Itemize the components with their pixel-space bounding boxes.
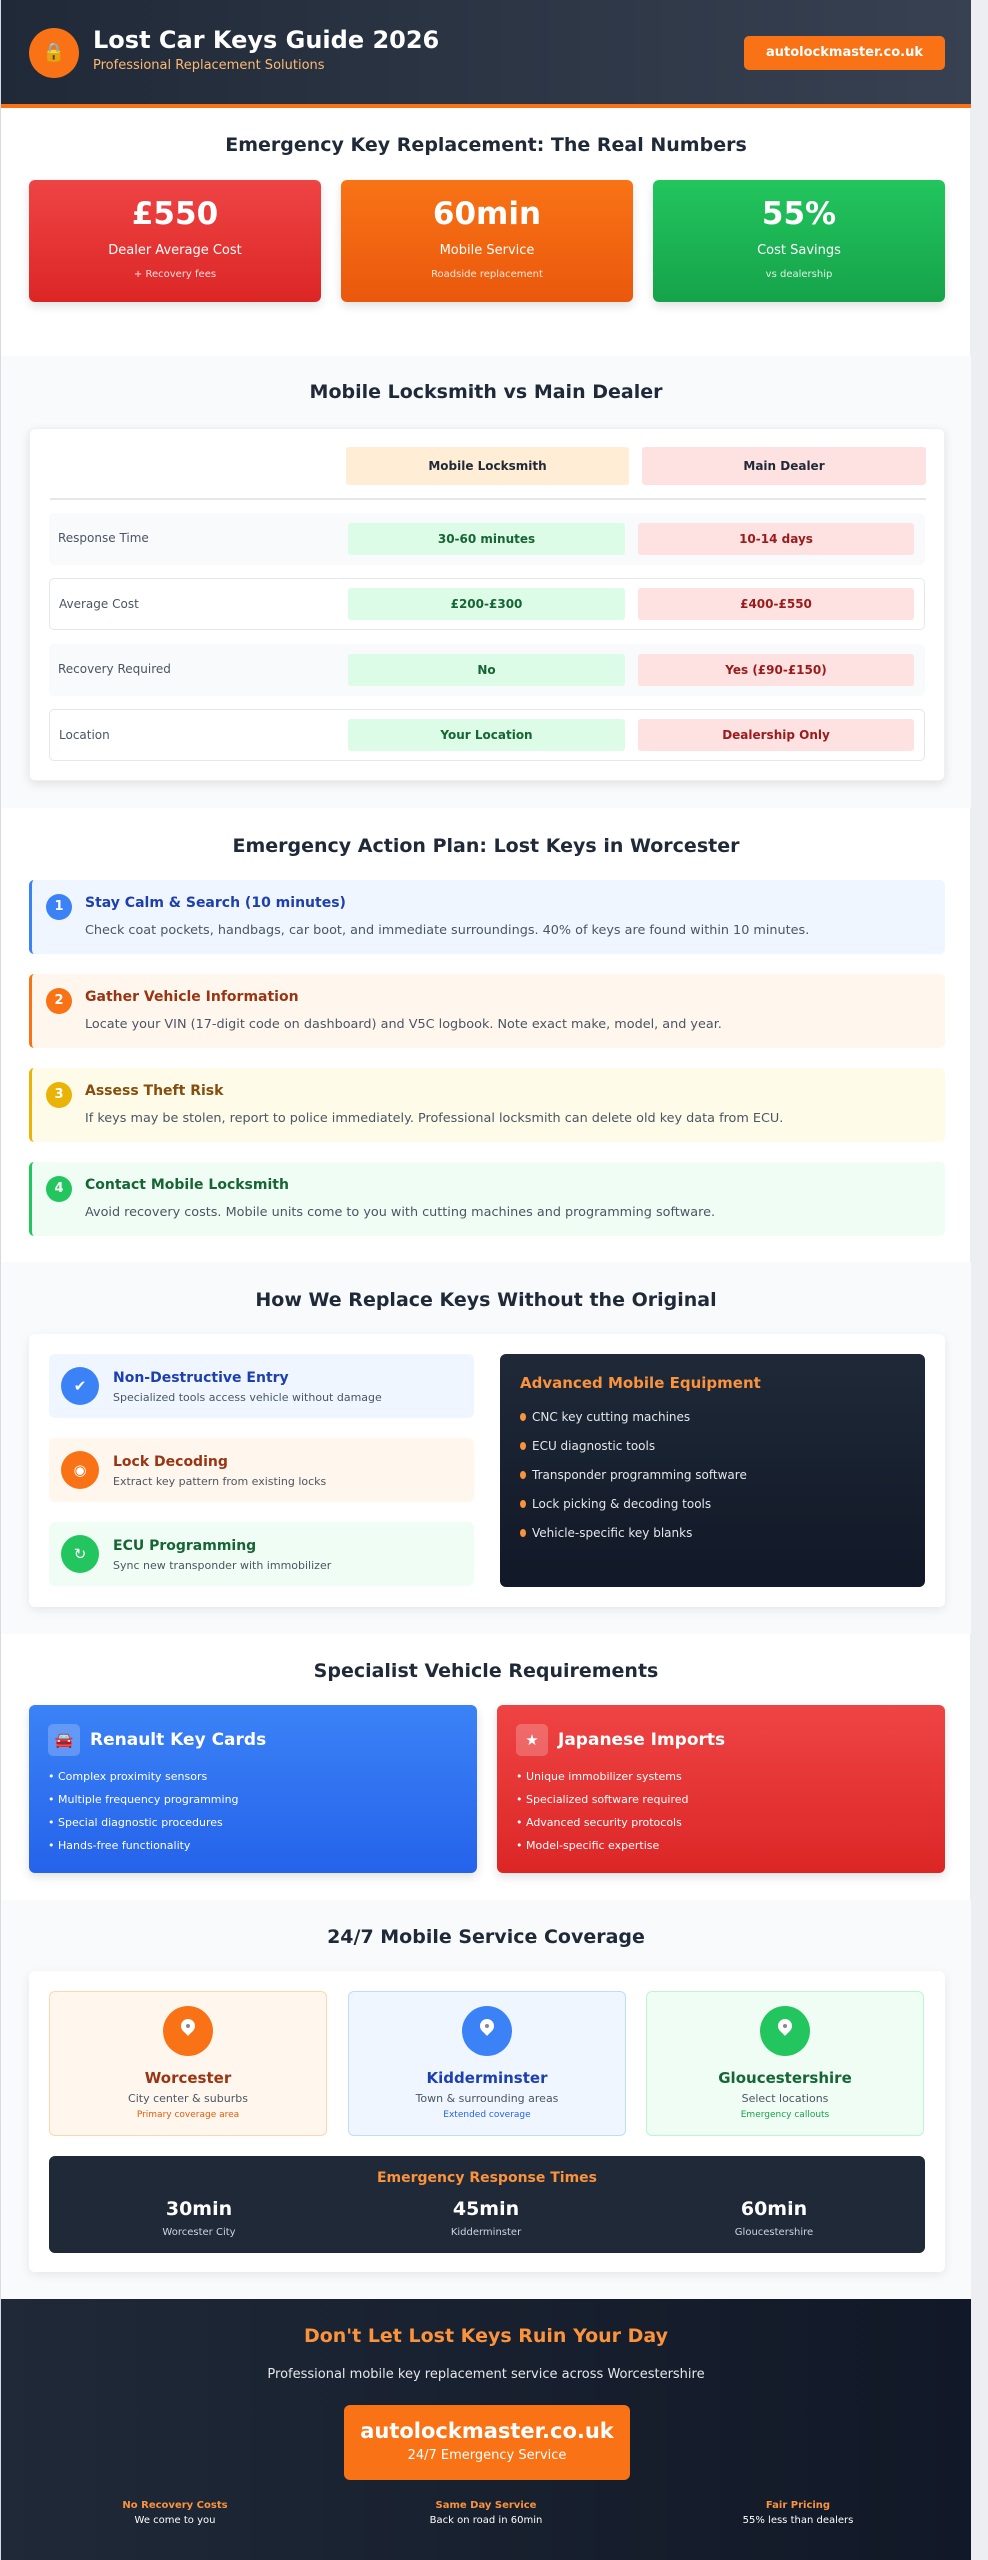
heading: specialist: Specialist Vehicle Requirements [314,1660,658,1682]
footer item: recovery: We come to you [135,2515,215,2526]
step 4 [29,1162,945,1236]
heading: real numbers: Emergency Key Replacement: The Real Numbers [225,134,747,156]
stat: dealer cost: + Recovery fees [134,269,216,280]
section: how we replace [1,1262,971,1634]
header: main dealer: Main Dealer [743,459,825,473]
stat: mobile service: Roadside replacement [431,269,543,280]
card: renault: • Special diagnostic procedures [48,1816,223,1829]
row: recovery [49,644,925,696]
panel: equipment: ECU diagnostic tools [532,1439,655,1453]
footer [1,2299,971,2560]
icon: lock: 🔒 [43,42,65,63]
footer item: recovery: No Recovery Costs [122,2500,228,2511]
location: worcester [49,1991,327,2136]
time: worcester: Worcester City [162,2227,236,2238]
item: non-destructive [49,1354,474,1418]
row: location: Dealership Only [722,728,830,742]
time: kidderminster: Kidderminster [451,2227,521,2238]
heading: How We Replace Keys Without the Original [255,1289,717,1311]
cta button [344,2405,630,2480]
step 2 [29,974,945,1048]
item: lock decoding: Lock Decoding [113,1454,228,1470]
time: gloucestershire: Gloucestershire [735,2227,813,2238]
time: kidderminster [451,2198,522,2238]
location: gloucestershire: Emergency callouts [741,2110,829,2120]
step 4: 4 [54,1181,64,1196]
item: ecu: ECU Programming [113,1538,256,1554]
footer item: pricing: Fair Pricing [766,2500,830,2511]
card: japanese: • Unique immobilizer systems [516,1770,682,1783]
stat: savings: Cost Savings [757,243,841,258]
heading: 24/7 Mobile Service Coverage [327,1926,645,1948]
card: japanese [497,1705,945,1873]
icon: lock [29,28,79,78]
location: gloucestershire: Gloucestershire [718,2069,852,2087]
cta button: autolockmaster.co.uk [360,2419,614,2443]
row: average cost: £400-£550 [740,597,812,611]
time: worcester: 30min [166,2198,232,2220]
stat: mobile service [341,180,633,302]
location: kidderminster: Extended coverage [443,2110,531,2120]
stat: savings [653,180,945,302]
stat: dealer cost [29,180,321,302]
row: recovery: Yes (£90-£150) [725,663,827,677]
step 3 [29,1068,945,1142]
item: ecu: ↻ [74,1545,86,1563]
step 1: Stay Calm & Search (10 minutes) [85,895,346,911]
location: worcester: Primary coverage area [137,2110,239,2120]
footer item: pricing: 55% less than dealers [743,2515,853,2526]
footer item: pricing [743,2500,853,2526]
step 3: Assess Theft Risk [85,1083,223,1099]
stat: dealer cost: Dealer Average Cost [108,243,242,258]
location: kidderminster [348,1991,626,2136]
title: Lost Car Keys Guide 2026 [93,26,439,54]
row: average cost [49,578,925,630]
step 4: Avoid recovery costs. Mobile units come to you with cutting machines and programming software. [85,1205,715,1220]
stat: savings: 55% [762,196,836,232]
panel: equipment: Transponder programming software [532,1468,747,1482]
row: recovery: No [477,663,496,677]
item: ecu: Sync new transponder with immobilizer [113,1559,331,1572]
cta button: 24/7 Emergency Service [408,2448,566,2463]
location: gloucestershire: Select locations [742,2092,828,2105]
card: renault: • Hands-free functionality [48,1839,190,1852]
location: gloucestershire [646,1991,924,2136]
panel: equipment: Advanced Mobile Equipment [520,1374,761,1392]
heading: action plan: Emergency Action Plan: Lost Keys in Worcester [232,835,739,857]
card [29,1971,945,2272]
step 2: Gather Vehicle Information [85,989,299,1005]
location: kidderminster: Town & surrounding areas [416,2092,558,2105]
item: non-destructive: Specialized tools access vehicle without damage [113,1391,382,1404]
card: renault: 🚘 [55,1731,73,1749]
stat: mobile service: 60min [433,196,541,232]
row: response time: 10-14 days [739,532,813,546]
row: response time: Response Time [58,531,149,545]
button: website [744,36,945,70]
section: comparison [1,356,971,808]
location: kidderminster: Kidderminster [427,2069,547,2087]
header: mobile locksmith [346,447,629,485]
card: japanese: Japanese Imports [558,1730,725,1750]
step 1: 1 [54,899,64,914]
stat: mobile service: Mobile Service [440,243,534,258]
card: japanese: • Specialized software required [516,1793,689,1806]
row: average cost: £200-£300 [451,597,522,611]
step 1 [29,880,945,954]
panel: equipment: Lock picking & decoding tools [532,1497,711,1511]
heading: Mobile Locksmith vs Main Dealer [310,381,662,403]
card: renault: • Complex proximity sensors [48,1770,207,1783]
footer item: recovery [122,2500,228,2526]
row: location [49,709,925,761]
step 4: Contact Mobile Locksmith [85,1177,289,1193]
stat: savings: vs dealership [766,269,832,280]
footer subtitle: Professional mobile key replacement service across Worcestershire [267,2367,705,2382]
item: non-destructive: ✔ [74,1377,86,1395]
item: lock decoding: Extract key pattern from existing locks [113,1475,326,1488]
panel: equipment: Vehicle-specific key blanks [532,1526,692,1540]
time: worcester [162,2198,236,2238]
panel: equipment [500,1354,925,1587]
footer item: same day: Same Day Service [436,2500,536,2511]
row: recovery: Recovery Required [58,662,171,676]
row: location: Location [59,728,110,742]
card: renault: Renault Key Cards [90,1730,266,1750]
response times panel [49,2156,925,2253]
item: lock decoding: ◉ [73,1461,87,1479]
time: gloucestershire [735,2198,813,2238]
header: mobile locksmith: Mobile Locksmith [428,459,547,473]
row: location: Your Location [440,728,533,742]
table card [29,428,945,781]
footer title: Don't Let Lost Keys Ruin Your Day [304,2325,668,2347]
header: main dealer [642,447,926,485]
subtitle: Professional Replacement Solutions [93,58,325,73]
step 1: Check coat pockets, handbags, car boot, and immediate surroundings. 40% of keys are found within 10 minutes. [85,923,809,938]
card: renault: • Multiple frequency programming [48,1793,239,1806]
header [1,0,971,108]
step 2: 2 [54,993,64,1008]
card: japanese: ★ [525,1731,539,1749]
time: kidderminster: 45min [453,2198,519,2220]
location: worcester: City center & suburbs [128,2092,248,2105]
panel: equipment: CNC key cutting machines [532,1410,690,1424]
section: coverage [1,1900,971,2300]
row: response time: 30-60 minutes [438,532,535,546]
item: ecu [49,1522,474,1586]
card: renault [29,1705,477,1873]
step 3: If keys may be stolen, report to police immediately. Professional locksmith can delete old key data from ECU. [85,1111,783,1126]
item: lock decoding [49,1438,474,1502]
card [29,1334,945,1607]
row: average cost: Average Cost [59,597,139,611]
footer item: same day: Back on road in 60min [430,2515,542,2526]
step 2: Locate your VIN (17-digit code on dashboard) and V5C logbook. Note exact make, model, and year. [85,1017,722,1032]
location: worcester: Worcester [145,2069,231,2087]
step 3: 3 [54,1087,64,1102]
time: gloucestershire: 60min [741,2198,807,2220]
card: japanese: • Advanced security protocols [516,1816,682,1829]
response times panel: Emergency Response Times [377,2170,597,2186]
row: response time [49,513,925,565]
footer item: same day [430,2500,542,2526]
button: website: autolockmaster.co.uk [766,45,923,60]
stat: dealer cost: £550 [132,196,218,232]
card: japanese: • Model-specific expertise [516,1839,659,1852]
item: non-destructive: Non-Destructive Entry [113,1370,289,1386]
